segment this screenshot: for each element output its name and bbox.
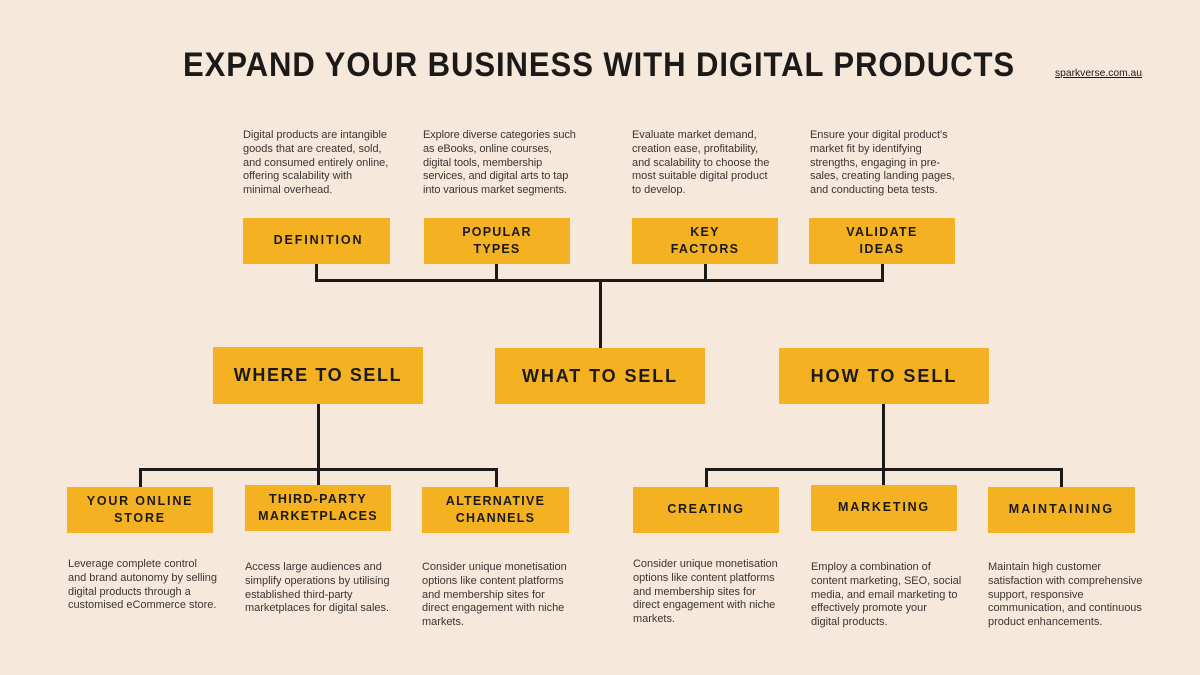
text: maintaining <box>988 561 1142 628</box>
box: maintaining <box>988 487 1135 533</box>
text: alternative channels: direct engagement with niche <box>422 602 564 614</box>
text: marketing: content marketing, SEO, social <box>811 575 961 587</box>
box: key factors <box>632 218 778 264</box>
box: what to sell: WHAT TO SELL <box>522 366 678 386</box>
text: key factors: to develop. <box>632 184 686 196</box>
text: definition: minimal overhead. <box>243 184 332 196</box>
text: third-party marketplaces <box>245 561 390 614</box>
text: marketing: effectively promote your <box>811 602 927 614</box>
text: maintaining: satisfaction with comprehensive <box>988 575 1142 587</box>
text: definition: goods that are created, sold, <box>243 143 382 155</box>
box: alternative channels: CHANNELS <box>456 511 535 525</box>
text: your online store: digital products through a <box>68 586 191 598</box>
box: third-party marketplaces <box>245 485 391 531</box>
text: validate ideas <box>810 129 955 196</box>
text: creating: and membership sites for <box>633 586 756 598</box>
box: third-party marketplaces: THIRD-PARTY <box>269 492 367 506</box>
box: how to sell <box>779 348 989 404</box>
text: validate ideas: market fit by identifying <box>810 143 922 155</box>
text: third-party marketplaces: marketplaces for digital sales. <box>245 602 389 614</box>
text: your online store: and brand autonomy by selling <box>68 572 217 584</box>
text: your online store: Leverage complete control <box>68 558 197 570</box>
box: where to sell <box>213 347 423 404</box>
box: marketing: MARKETING <box>838 500 930 514</box>
box: creating <box>633 487 779 533</box>
text: alternative channels <box>422 561 567 628</box>
text: maintaining: support, responsive <box>988 588 1083 600</box>
text: third-party marketplaces: established third-party <box>245 588 353 600</box>
text: key factors: most suitable digital product <box>632 170 767 182</box>
text: definition: Digital products are intangible <box>243 129 387 141</box>
box: your online store: STORE <box>114 511 166 525</box>
box: third-party marketplaces: MARKETPLACES <box>258 509 378 523</box>
box: popular types: TYPES <box>473 242 520 256</box>
text: third-party marketplaces: simplify operations by utilising <box>245 575 390 587</box>
box: popular types: POPULAR <box>462 225 532 239</box>
text: your online store: customised eCommerce store. <box>68 599 216 611</box>
text: creating: direct engagement with niche <box>633 599 775 611</box>
box: definition <box>243 218 390 264</box>
text: key factors <box>632 129 769 196</box>
title: EXPAND YOUR BUSINESS WITH DIGITAL PRODUCTS <box>183 46 1015 84</box>
text: marketing: Employ a combination of <box>811 561 931 573</box>
text: creating: markets. <box>633 613 675 625</box>
box: alternative channels: ALTERNATIVE <box>446 494 545 508</box>
box: key factors: FACTORS <box>671 242 739 256</box>
box: definition: DEFINITION <box>274 232 363 246</box>
text: definition <box>243 129 388 196</box>
text: creating <box>633 558 778 625</box>
box: what to sell <box>495 348 705 404</box>
text: popular types: into various market segments. <box>423 184 567 196</box>
text: maintaining: Maintain high customer <box>988 561 1101 573</box>
text: popular types: as eBooks, online courses, <box>423 143 552 155</box>
text: your online store <box>68 558 217 611</box>
box: maintaining: MAINTAINING <box>1009 502 1114 516</box>
text: validate ideas: and conducting beta tests. <box>810 184 938 196</box>
text: alternative channels: Consider unique monetisation <box>422 561 567 573</box>
text: validate ideas: Ensure your digital product's <box>810 129 948 141</box>
box: alternative channels <box>422 487 569 533</box>
text: key factors: Evaluate market demand, <box>632 129 757 141</box>
text: key factors: creation ease, profitability, <box>632 143 758 155</box>
text: popular types: services, and digital arts to tap <box>423 170 568 182</box>
box: how to sell: HOW TO SELL <box>811 366 957 386</box>
connector: how to sell tree <box>705 404 1063 487</box>
text: alternative channels: markets. <box>422 616 464 628</box>
box: where to sell: WHERE TO SELL <box>234 365 402 385</box>
text: popular types <box>423 129 576 196</box>
box: your online store <box>67 487 213 533</box>
text: alternative channels: options like content platforms <box>422 575 564 587</box>
text: maintaining: communication, and continuous <box>988 602 1142 614</box>
text: marketing: digital products. <box>811 616 888 628</box>
box: validate ideas: IDEAS <box>860 242 904 256</box>
text: definition: offering scalability with <box>243 170 352 182</box>
box: popular types <box>424 218 570 264</box>
text: alternative channels: and membership sites for <box>422 588 545 600</box>
text: popular types: Explore diverse categories such <box>423 129 576 141</box>
text: maintaining: product enhancements. <box>988 616 1102 628</box>
connector: top tree <box>315 264 884 348</box>
box: marketing <box>811 485 957 531</box>
text: popular types: digital tools, membership <box>423 156 542 168</box>
text: key factors: and scalability to choose the <box>632 156 769 168</box>
box: your online store: YOUR ONLINE <box>87 494 193 508</box>
text: third-party marketplaces: Access large audiences and <box>245 561 382 573</box>
box: key factors: KEY <box>690 225 720 239</box>
website link: sparkverse.com.au <box>1055 68 1142 79</box>
box: validate ideas: VALIDATE <box>846 225 918 239</box>
text: creating: Consider unique monetisation <box>633 558 778 570</box>
box: creating: CREATING <box>667 502 745 516</box>
text: marketing: media, and email marketing to <box>811 588 957 600</box>
box: validate ideas <box>809 218 955 264</box>
text: validate ideas: sales, creating landing pages, <box>810 170 955 182</box>
connector: where to sell tree <box>139 404 498 487</box>
text: marketing <box>811 561 961 628</box>
text: definition: and consumed entirely online, <box>243 156 388 168</box>
text: validate ideas: strengths, engaging in pre- <box>810 156 940 168</box>
text: creating: options like content platforms <box>633 572 775 584</box>
